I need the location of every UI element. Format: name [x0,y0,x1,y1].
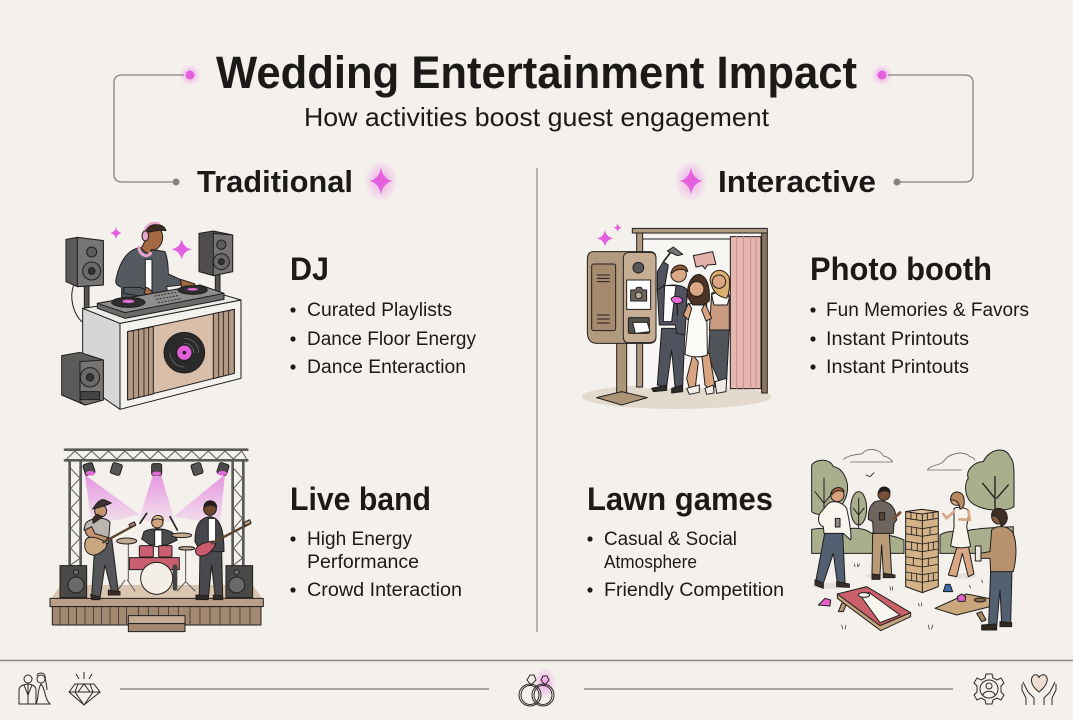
illustration: lawn games [812,449,1016,631]
text block: DJ: Dance Enteraction [307,357,466,378]
text block: Lawn games: Casual & Social [604,529,737,550]
left guitarist [84,500,136,600]
column heading: Interactive [674,160,876,202]
text block: Live band: Live band [290,481,431,517]
text block: DJ: Dance Floor Energy [307,329,476,350]
text block: Live band [290,481,462,601]
icon: wedding rings [519,667,556,706]
red cornhole board [837,587,911,631]
text block: Live band: High Energy [307,529,412,550]
person: bride [683,274,715,394]
icon: hands with heart [1022,675,1056,705]
text block: Lawn games: Atmosphere [604,552,697,572]
drummer [117,513,195,594]
jenga tower [906,509,938,593]
person: groom [652,247,688,393]
right guitarist [195,501,251,600]
text block: DJ [290,251,476,378]
subtitle: How activities boost guest engagement [304,102,770,132]
illustration: live band on stage [50,450,263,632]
text block: DJ: Curated Playlists [307,300,452,321]
booth machine [587,252,656,405]
tan cornhole board [935,594,997,622]
person 3 [943,492,974,577]
footer divider [0,660,1073,662]
icon: diamond [69,672,100,705]
person 1 [815,488,851,588]
text block: Photo booth: Instant Printouts [826,329,969,350]
person: blonde woman [708,270,730,393]
text block: Lawn games: Lawn games [587,481,773,517]
illustration: DJ booth [62,223,241,409]
header bracket: connector lines and dots [114,64,973,186]
text block: Photo booth: Fun Memories & Favors [826,300,1029,321]
footer lines [120,688,953,690]
text block: Photo booth [810,251,1029,378]
column heading: Traditional: Traditional [197,164,353,199]
column heading: Interactive: Interactive [718,164,876,199]
text block: Live band: Performance [307,552,419,573]
person 2 [868,487,900,579]
text block: Lawn games [587,481,784,601]
text block: Photo booth: Photo booth [810,251,992,287]
text block: DJ: DJ [290,251,329,287]
illustration: photo booth [582,223,772,409]
person 4 [975,508,1016,630]
center divider [536,168,538,632]
text block: Lawn games: Friendly Competition [604,580,784,601]
text block: Live band: Crowd Interaction [307,580,462,601]
text block: Photo booth: Instant Printouts [826,357,969,378]
title: Wedding Entertainment Impact [216,47,857,98]
column heading: Traditional [197,160,398,202]
icon: gear with person [974,674,1004,704]
icon: couple [19,673,50,704]
